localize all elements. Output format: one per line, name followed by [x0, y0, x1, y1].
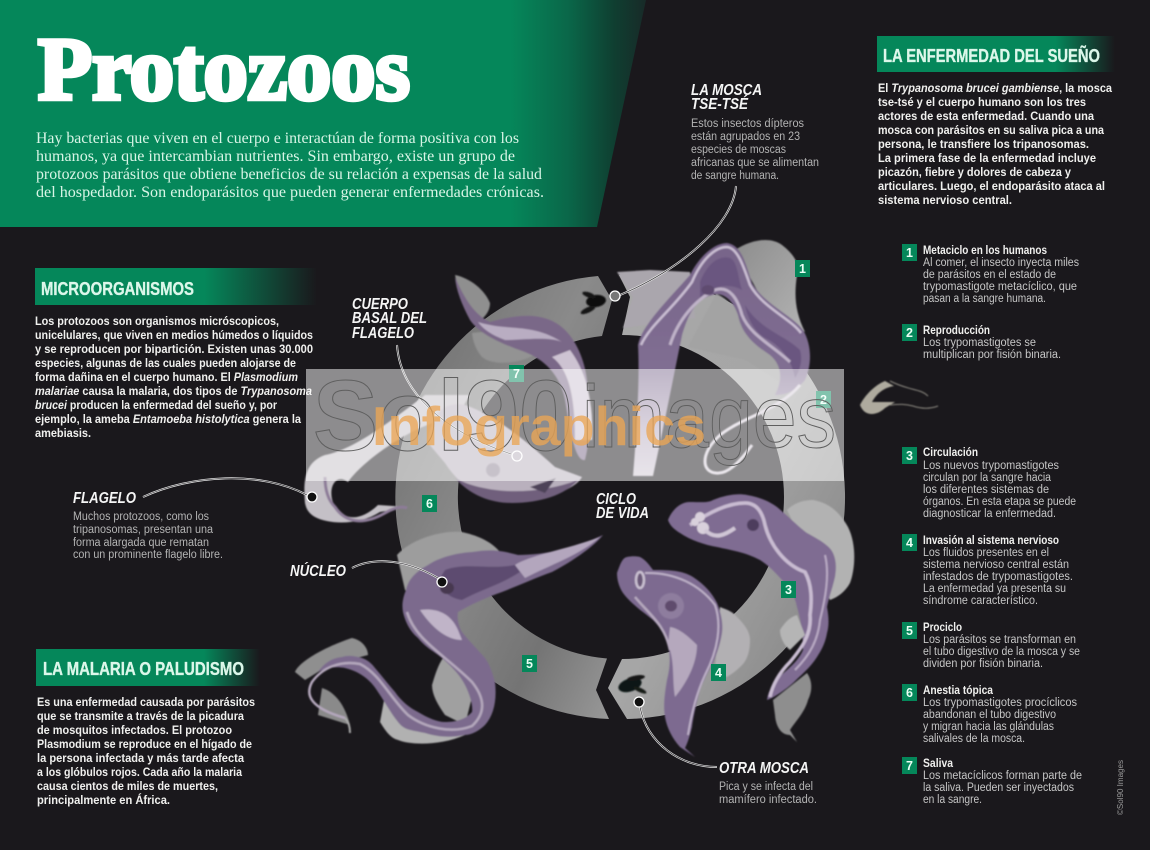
heading: microorganismos: MICROORGANISMOS: [41, 279, 194, 299]
title: Protozoos: [38, 21, 410, 119]
leader: la mosca: [610, 186, 736, 301]
text: microorganismos: amebiasis.: [35, 426, 91, 440]
step 4: [902, 534, 1073, 607]
step 5: el tubo digestivo de la mosca y se: [923, 646, 1080, 658]
stage badges: 3: [785, 583, 792, 597]
text: la enfermedad del sueño: sistema nervioso central.: [878, 193, 1012, 207]
callout: la mosca tse-tsé: TSE-TSÉ: [691, 96, 749, 113]
step 6: Los trypomastigotes procíclicos: [923, 697, 1077, 709]
text: la malaria: causa cientos de miles de muertes,: [37, 779, 218, 793]
text: la enfermedad del sueño: [878, 81, 1112, 207]
step 4: Los fluidos presentes en el: [923, 547, 1049, 559]
step 5: [902, 622, 1080, 670]
leader: flagelo: [143, 478, 317, 502]
text: la enfermedad del sueño: El Trypanosoma brucei gambiense, la mosca: [878, 81, 1112, 95]
step 4: Invasión al sistema nervioso: [923, 535, 1059, 547]
callout: flagelo: forma alargada que rematan: [73, 537, 209, 549]
icon: fly top: [580, 290, 607, 316]
callout: otra mosca: OTRA MOSCA: [719, 760, 809, 777]
step 2: multiplican por fisión binaria.: [923, 349, 1061, 361]
small trypanosomes: [860, 381, 938, 414]
step 6: [902, 684, 1077, 745]
heading: la enfermedad del sueño: [877, 36, 1115, 72]
text: la enfermedad del sueño: mosca con parásitos en su saliva pica a una: [878, 123, 1104, 137]
step 3: 3: [906, 449, 913, 463]
step 3: diagnosticar la enfermedad.: [923, 508, 1056, 520]
text: la malaria: a los glóbulos rojos. Cada año la malaria: [37, 765, 242, 779]
step 3: Circulación: [923, 447, 978, 459]
text: la enfermedad del sueño: persona, le transfiere los tripanosomas.: [878, 137, 1089, 151]
label: ciclo de vida: DE VIDA: [596, 505, 649, 522]
step 7: la saliva. Pueden ser inyectados: [923, 782, 1074, 794]
text: la malaria: Plasmodium se reproduce en el hígado de: [37, 737, 252, 751]
step 5: Prociclo: [923, 622, 962, 634]
worm stage 7: [304, 275, 592, 522]
callout: otra mosca: mamífero infectado.: [719, 794, 817, 806]
heading: microorganismos: [35, 268, 317, 305]
header panel: [0, 0, 646, 227]
text: la enfermedad del sueño: articulares. Luego, el endoparásito ataca al: [878, 179, 1105, 193]
leader: otra mosca: [634, 697, 717, 767]
text: la malaria: Es una enfermedad causada por parásitos: [37, 695, 255, 709]
worm stage 1: [617, 240, 810, 476]
step 1: trypomastigote metacíclico, que: [923, 281, 1077, 293]
step 2: Reproducción: [923, 325, 990, 337]
label: cuerpo basal del flagelo: BASAL DEL: [352, 310, 427, 327]
step 7: Saliva: [923, 758, 954, 770]
intro text: [36, 130, 544, 201]
text: microorganismos: especies, algunas de las cuales pueden alojarse de: [35, 356, 296, 370]
worm stage 3: [668, 494, 854, 742]
callout: otra mosca: Pica y se infecta del: [719, 781, 813, 793]
callout: flagelo: [73, 490, 223, 561]
text: la malaria: principalmente en África.: [37, 792, 170, 807]
worm stage 5: [295, 532, 603, 744]
heading: la malaria o paludismo: LA MALARIA O PALUDISMO: [43, 659, 244, 679]
label: ciclo de vida: [596, 491, 649, 522]
step 1: [902, 244, 1079, 305]
callout: la mosca tse-tsé: están agrupados en 23: [691, 131, 800, 143]
step 6: 6: [906, 686, 913, 700]
label: cuerpo basal del flagelo: CUERPO: [352, 296, 408, 313]
step 4: síndrome característico.: [923, 595, 1038, 607]
step 6: Anestia tópica: [923, 685, 994, 697]
watermark: Sol90: [313, 360, 573, 472]
text: la malaria: la persona infectada y más tarde afecta: [37, 751, 244, 765]
callout: flagelo: FLAGELO: [73, 490, 136, 507]
heading: la enfermedad del sueño: LA ENFERMEDAD DEL SUEÑO: [883, 45, 1100, 66]
text: microorganismos: forma dañina en el cuerpo humano. El Plasmodium: [35, 370, 298, 384]
text: la enfermedad del sueño: picazón, fiebre y dolores de cabeza y: [878, 165, 1071, 179]
step 1: pasan a la sangre humana.: [923, 293, 1046, 305]
callout: la mosca tse-tsé: de sangre humana.: [691, 170, 779, 182]
intro text: del hospedador. Son endoparásitos que pueden generar enfermedades crónicas.: [36, 184, 544, 201]
callout: la mosca tse-tsé: Estos insectos dípteros: [691, 118, 804, 130]
text: la enfermedad del sueño: actores de esta enfermedad. Cuando una: [878, 109, 1094, 123]
step 5: Los parásitos se transforman en: [923, 634, 1076, 646]
step 3: órganos. En esta etapa se puede: [923, 496, 1076, 508]
callout: flagelo: con un prominente flagelo libre.: [73, 549, 223, 561]
step 3: [902, 447, 1076, 520]
callout: la mosca tse-tsé: [691, 82, 819, 182]
intro text: humanos, ya que intercambian nutrientes. Sin embargo, existe un grupo de: [36, 148, 515, 165]
step 3: circulan por la sangre hacia: [923, 472, 1052, 484]
callout: flagelo: tripanosomas, presentan una: [73, 524, 214, 536]
callout: la mosca tse-tsé: africanas que se alimentan: [691, 157, 819, 169]
callout: otra mosca: [719, 760, 817, 806]
step 4: sistema nervioso central están: [923, 559, 1069, 571]
step 4: 4: [906, 536, 913, 550]
life cycle diagram: [295, 240, 938, 757]
text: la enfermedad del sueño: La primera fase de la enfermedad incluye: [878, 151, 1096, 165]
label: núcleo: NÚCLEO: [290, 562, 346, 580]
watermark: [306, 360, 844, 481]
text: microorganismos: malariae causa la malaria, dos tipos de Trypanosoma: [35, 384, 312, 398]
step 7: 7: [906, 759, 913, 773]
stage badges: 1: [799, 262, 806, 276]
ring: left segment: [395, 276, 612, 719]
step 7: Los metacíclicos forman parte de: [923, 770, 1082, 782]
step 1: 1: [906, 246, 913, 260]
step 5: 5: [906, 624, 913, 638]
label: ciclo de vida: CICLO: [596, 491, 636, 508]
intro text: Hay bacterias que viven en el cuerpo e interactúan de forma positiva con los: [36, 130, 519, 147]
step 1: Metaciclo en los humanos: [923, 245, 1047, 257]
stage badges: 4: [715, 666, 722, 680]
text: microorganismos: brucei producen la enfermedad del sueño y, por: [35, 398, 277, 412]
leader: núcleo: [352, 561, 447, 587]
callout: la mosca tse-tsé: especies de moscas: [691, 144, 786, 156]
text: microorganismos: Los protozoos son organismos micróscopicos,: [35, 314, 279, 328]
worm stage 4: [617, 556, 750, 757]
step 1: de parásitos en el estado de: [923, 269, 1056, 281]
step 3: Los nuevos trypomastigotes: [923, 460, 1059, 472]
callout: la mosca tse-tsé: LA MOSCA: [691, 82, 762, 99]
step 2: Los trypomastigotes se: [923, 337, 1036, 349]
step 5: dividen por fisión binaria.: [923, 658, 1043, 670]
leader: cuerpo basal: [397, 345, 522, 461]
credit: ©Sol90 Images: [1116, 760, 1125, 815]
step 1: Al comer, el insecto inyecta miles: [923, 257, 1079, 269]
heading: la malaria o paludismo: [36, 649, 260, 686]
text: microorganismos: y se reproducen por bipartición. Existen unas 30.000: [35, 342, 313, 356]
label: cuerpo basal del flagelo: [352, 296, 427, 342]
text: la malaria: que se transmite a través de la picadura: [37, 709, 244, 723]
text: la malaria: [37, 695, 255, 807]
stage badges: 2: [820, 393, 827, 407]
step 6: y migran hacia las glándulas: [923, 721, 1054, 733]
step 4: infestados de trypomastigotes.: [923, 571, 1073, 583]
text: microorganismos: ejemplo, la ameba Entamoeba histolytica genera la: [35, 412, 301, 426]
stage badges: 7: [513, 367, 520, 381]
callout: flagelo: Muchos protozoos, como los: [73, 511, 209, 523]
step 3: los diferentes sistemas de: [923, 484, 1049, 496]
icon: fly bottom: [617, 674, 647, 695]
text: microorganismos: [35, 314, 313, 440]
text: la malaria: de mosquitos infectados. El protozoo: [37, 723, 232, 737]
stage badges: 5: [526, 657, 533, 671]
step 4: La enfermedad ya presenta su: [923, 583, 1066, 595]
text: la enfermedad del sueño: tse-tsé y el cuerpo humano son los tres: [878, 95, 1086, 109]
step 7: en la sangre.: [923, 794, 982, 806]
intro text: protozoos parásitos que obtiene beneficios de su relación a expensas de la salud: [36, 166, 542, 183]
stage badges: 6: [426, 497, 433, 511]
step 6: abandonan el tubo digestivo: [923, 709, 1056, 721]
ring: right segment: [608, 275, 845, 719]
step 6: salivales de la mosca.: [923, 733, 1025, 745]
watermark: Infographics: [372, 395, 706, 457]
step 2: [902, 324, 1061, 361]
label: cuerpo basal del flagelo: FLAGELO: [352, 325, 414, 342]
step 7: [902, 757, 1082, 806]
step 2: 2: [906, 326, 913, 340]
text: microorganismos: unicelulares, que viven en medios húmedos o líquidos: [35, 328, 313, 342]
watermark: images: [582, 367, 836, 466]
stage badges: [422, 260, 831, 681]
